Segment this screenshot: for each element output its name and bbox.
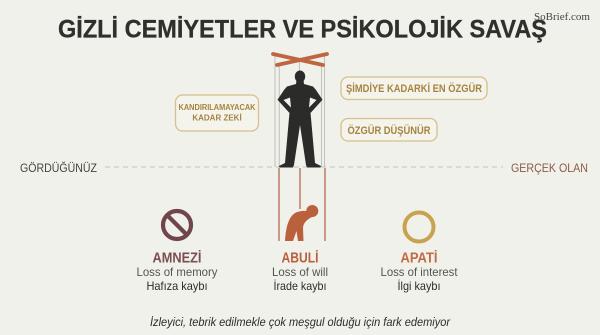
callout: too smart to be fooled: KANDIRILAMAYACAK	[178, 103, 256, 112]
puppet strings lower	[279, 168, 325, 241]
icon: puppet control cross	[273, 54, 327, 65]
text: abulia: İrade kaybı	[274, 279, 326, 293]
callout: free thinker	[341, 118, 437, 141]
text: amnesia	[136, 250, 218, 293]
text: apathy: Loss of interest	[380, 265, 458, 279]
text: amnesia: Loss of memory	[136, 265, 218, 279]
text: apathy: İlgi kaybı	[398, 279, 440, 293]
callout: freest ever: ŞİMDİYE KADARKİ EN ÖZGÜR	[346, 82, 482, 95]
text: apathy	[380, 250, 458, 293]
title: GİZLİ CEMİYETLER VE PSİKOLOJİK SAVAŞ	[58, 16, 547, 44]
callout: freest ever	[341, 77, 487, 100]
text: amnesia: AMNEZİ	[152, 250, 202, 266]
text: abulia: Loss of will	[272, 265, 328, 279]
watermark: SoBrief.com	[534, 12, 590, 23]
icon: prohibition sign	[163, 211, 191, 239]
puppet strings upper	[275, 56, 324, 167]
text: abulia: ABULİ	[282, 250, 318, 266]
icon: standing silhouette	[278, 70, 322, 168]
text: amnesia: Hafıza kaybı	[146, 279, 208, 293]
icon: bent figure	[285, 205, 318, 241]
label: what you see: GÖRDÜĞÜNÜZ	[20, 160, 97, 175]
callout: too smart to be fooled	[176, 95, 258, 131]
label: what is real: GERÇEK OLAN	[511, 161, 588, 175]
callout: free thinker: ÖZGÜR DÜŞÜNÜR	[348, 124, 431, 137]
icon: ring	[404, 212, 434, 242]
footer note: İzleyici, tebrik edilmekle çok meşgul olduğu için fark edemiyor	[150, 317, 451, 329]
text: apathy: APATİ	[400, 250, 438, 266]
text: abulia	[272, 250, 328, 293]
callout: too smart to be fooled: KADAR ZEKİ	[192, 114, 242, 122]
